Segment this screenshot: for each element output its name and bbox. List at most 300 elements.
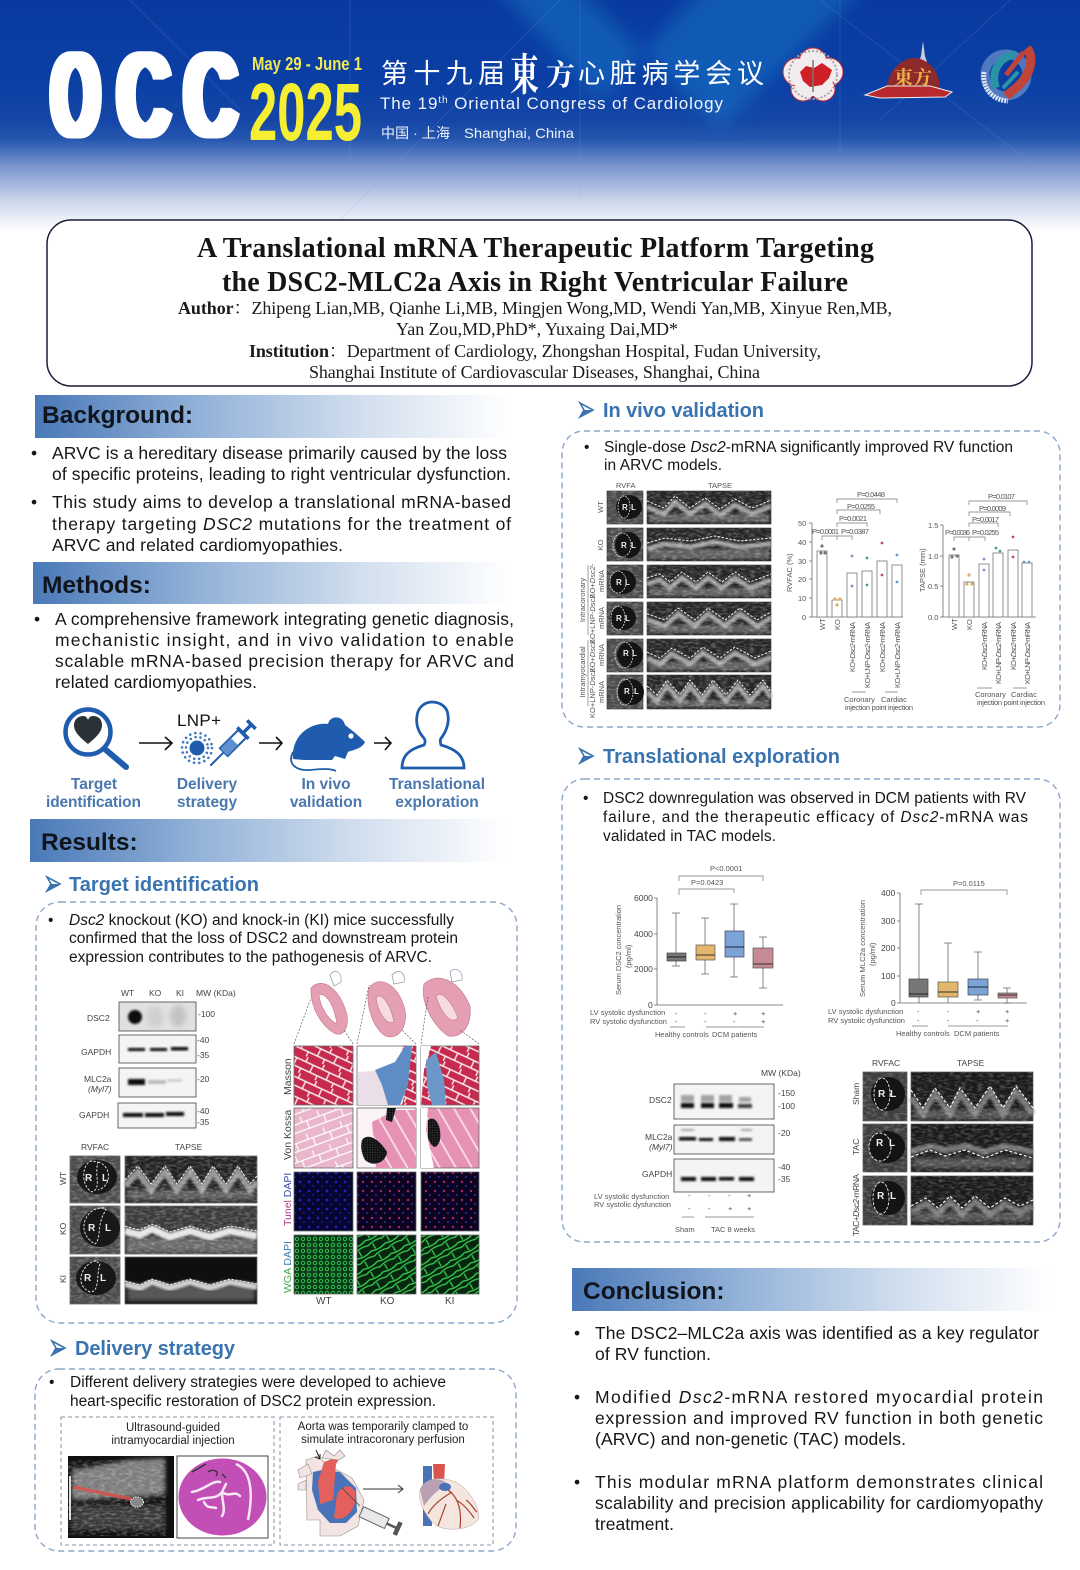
echocardiography: WT KO KI: R [84, 1273, 92, 1284]
sub-panel: intracoronary perfusion: simulate intracoronary perfusion [301, 1434, 465, 1446]
box plot: serum MLC2a: 100 [881, 971, 895, 981]
echocardiography: WT KO KI: R [88, 1223, 96, 1234]
box plot: serum DSC2: - [675, 1017, 678, 1026]
histology: Masson Von Kossa Tunel WGA image grid: WT [316, 1296, 332, 1307]
authors [178, 298, 892, 339]
bar chart: RVFAC: 40 [798, 538, 806, 547]
subheading: In vivo validation: In vivo validation [603, 400, 764, 422]
conclusion bullet text: of RV function. [595, 1344, 711, 1364]
bar chart: TAPSE: 0.5 [928, 582, 938, 591]
box plot: serum MLC2a: DCM patients [954, 1029, 1000, 1038]
background bullet text: ARVC is a hereditary disease primarily caused by the loss [52, 443, 507, 463]
box plot: serum MLC2a [828, 879, 1027, 1038]
bar chart: TAPSE: Coronary [975, 690, 1006, 699]
echocardiography grid: six groups: mRNA [597, 570, 606, 592]
western blot: TAC model: + [728, 1204, 733, 1213]
methods bullet text [34, 609, 514, 692]
echocardiography grid: six groups: R [616, 614, 622, 623]
congress location [381, 125, 574, 141]
step label: Target identification: identification [46, 794, 141, 811]
conclusion bullet text: This modular mRNA platform demonstrates clinical [595, 1472, 1043, 1492]
step label: Target identification: Target [71, 776, 117, 793]
heading: Background [35, 395, 510, 438]
panel text [583, 790, 1028, 845]
western blot: TAC model: + [747, 1191, 752, 1200]
bar chart: RVFAC: RVFAC (%) [785, 553, 794, 592]
congress name in English: The 19 [380, 94, 437, 113]
panel: in vivo validation [562, 431, 1060, 727]
institution [249, 341, 821, 382]
step label: Translational exploration: exploration [395, 794, 479, 811]
box plot: serum DSC2 [590, 864, 783, 1039]
bar chart: RVFAC [785, 490, 913, 712]
arrow [259, 737, 282, 750]
bar chart: TAPSE: KO+Dsc2-mRNA [1009, 622, 1018, 670]
conclusion bullet text: (ARVC) and non-genetic (TAC) models. [595, 1429, 906, 1449]
bar chart: RVFAC: P=0.0448 [857, 490, 885, 499]
echocardiography grid: six groups: WT [596, 501, 605, 513]
sub-panel: intracoronary perfusion: Aorta was temporarily clamped to [298, 1421, 468, 1433]
echocardiography grid: six groups [578, 481, 771, 718]
echocardiography: Sham TAC treated: TAC+Dsc2-mRNA [851, 1174, 861, 1236]
echocardiography grid: six groups: KO+LNP-Dsc2- [588, 666, 597, 718]
western blot: TAC model: (Myl7) [649, 1142, 673, 1152]
echocardiography grid: six groups: RVFA [616, 481, 635, 490]
histology: Masson Von Kossa Tunel WGA image grid: KI [445, 1296, 454, 1307]
heading: Methods: Methods: [42, 572, 151, 599]
western blot: DSC2 MLC2a GAPDH: MLC2a [84, 1074, 112, 1084]
box plot: serum MLC2a: LV systolic dysfunction [828, 1007, 903, 1016]
histology: whole heart sections [294, 969, 479, 1044]
illustration: coronary heart [420, 1464, 479, 1529]
box plot: serum MLC2a: Healthy controls [896, 1029, 950, 1038]
echocardiography: Sham TAC treated: TAC [851, 1139, 861, 1155]
conclusion bullet text: Modified Dsc2-mRNA restored myocardial protein [595, 1387, 1043, 1407]
congress name in Chinese: 方 [546, 59, 575, 92]
western blot: TAC model: TAC 8 weeks [711, 1225, 755, 1234]
congress date: May 29 - June 1 [252, 54, 362, 74]
ultrasound image [68, 1456, 174, 1538]
echocardiography: Sham TAC treated: TAPSE [957, 1058, 985, 1068]
echocardiography: WT KO KI: KO [58, 1222, 68, 1235]
western blot: DSC2 MLC2a GAPDH: -40 [197, 1106, 210, 1116]
icon: medical society seal [783, 48, 843, 101]
bar chart: TAPSE: P=0.0107 [988, 492, 1015, 501]
box plot: serum DSC2: Healthy controls [655, 1030, 709, 1039]
bar chart: TAPSE: TAPSE (mm) [918, 548, 927, 592]
echocardiography: Sham TAC treated: Sham [851, 1083, 861, 1105]
western blot: DSC2 MLC2a GAPDH: -40 [197, 1035, 210, 1045]
congress location: 中国 · 上海 [381, 125, 450, 141]
poster title: A Translational mRNA Therapeutic Platform Targeting [197, 233, 874, 264]
conclusion bullet text: scalability and precision applicability for cardiomyopathy [595, 1493, 1043, 1513]
heading: Background: Background: [42, 402, 193, 429]
box plot: serum MLC2a: + [1005, 1007, 1010, 1016]
icon: magnifier with heart [66, 710, 126, 767]
box plot: serum MLC2a: 300 [881, 916, 895, 926]
institution: Institution：Department of Cardiology, Zhongshan Hospital, Fudan University, [249, 341, 821, 361]
panel text: • [49, 1374, 54, 1391]
conclusion bullet text [574, 1323, 1043, 1534]
western blot: TAC model: LV systolic dysfunction [594, 1192, 669, 1201]
box plot: serum DSC2: 0 [648, 1000, 653, 1010]
echocardiography: Sham TAC treated: RVFAC [872, 1058, 900, 1068]
box plot: serum DSC2: + [761, 1009, 766, 1018]
OCC logo wordmark: O [52, 27, 100, 163]
box plot: serum DSC2: + [733, 1009, 738, 1018]
step label: Delivery strategy [177, 776, 238, 811]
bar chart: TAPSE: KO+LNP-Dsc2-mRNA [994, 622, 1003, 684]
bar chart: TAPSE: P=0.0017 [972, 515, 999, 524]
bar chart: RVFAC: KO+Dsc2-mRNA [878, 622, 887, 672]
step label: In vivo validation: validation [290, 794, 362, 811]
box plot: serum MLC2a: - [976, 1016, 979, 1025]
panel: delivery strategy [35, 1369, 516, 1551]
western blot: DSC2 MLC2a GAPDH: (Myl7) [88, 1084, 112, 1094]
sub-panel: intramyocardial injection [61, 1417, 274, 1545]
histology: Masson Von Kossa Tunel WGA image grid: KO [380, 1296, 395, 1307]
step label: Translational exploration: Translational [389, 776, 485, 793]
echocardiography grid: six groups: L [631, 503, 636, 512]
heading: Methods [33, 562, 510, 604]
echocardiography grid: six groups: KO+Dsc2- [588, 637, 597, 672]
bar chart: TAPSE: P=0.0036 [945, 528, 970, 537]
bar chart: TAPSE: KO [965, 619, 974, 630]
OCC logo wordmark: C [184, 27, 237, 163]
western blot: DSC2 MLC2a GAPDH: KI [176, 988, 184, 998]
western blot: TAC model: - [728, 1191, 731, 1200]
echocardiography grid: six groups: L [625, 578, 630, 587]
western blot: TAC model: GAPDH [642, 1169, 672, 1179]
panel text: • [48, 912, 53, 929]
sub-panel: intramyocardial injection: intramyocardial injection [111, 1435, 235, 1447]
bar chart: RVFAC: KO+LNP-Dsc2-mRNA [893, 622, 902, 688]
western blot: TAC model: RV systolic dysfunction [594, 1200, 671, 1209]
echocardiography: Sham TAC treated: R [876, 1138, 884, 1149]
OCC logo wordmark [52, 27, 237, 163]
arrow [374, 737, 391, 750]
western blot: DSC2 MLC2a GAPDH: DSC2 [87, 1013, 110, 1023]
background bullet text: of specific proteins, leading to right ventricular dysfunction. [52, 464, 511, 484]
western blot: TAC model: -40 [778, 1162, 791, 1172]
background bullet text [31, 443, 511, 555]
western blot: DSC2 MLC2a GAPDH [79, 988, 236, 1128]
box plot: serum DSC2: Serum DSC2 concentration [614, 905, 623, 995]
OCC logo wordmark: C [117, 27, 170, 163]
step label: Delivery strategy: strategy [177, 794, 238, 811]
conclusion bullet text: expression and improved RV function in both genetic [595, 1408, 1043, 1428]
bar chart: TAPSE: P=0.0255 [972, 528, 999, 537]
heading: Results [30, 819, 507, 862]
echocardiography grid: six groups: R [624, 687, 630, 696]
bar chart: RVFAC: 10 [798, 594, 806, 603]
echocardiography: WT KO KI [58, 1142, 257, 1304]
echocardiography: WT KO KI: WT [58, 1172, 68, 1185]
step label: Delivery strategy: Delivery [177, 776, 238, 793]
step label: Target identification [46, 776, 141, 811]
box plot: serum DSC2: 6000 [634, 893, 653, 903]
subheading: Delivery strategy: Delivery strategy [75, 1338, 236, 1360]
echocardiography: WT KO KI: L [102, 1173, 108, 1184]
bar chart: RVFAC: injection point injection [845, 703, 913, 712]
sub-panel: intracoronary perfusion [280, 1417, 493, 1545]
bar chart: TAPSE: 0.0 [928, 613, 938, 622]
box plot: serum MLC2a: + [976, 1007, 981, 1016]
panel text: Different delivery strategies were developed to achieve [70, 1374, 446, 1391]
panel text: validated in TAC models. [603, 828, 776, 845]
bar chart: TAPSE: 1.5 [928, 521, 938, 530]
box plot: serum DSC2: DCM patients [712, 1030, 758, 1039]
box plot: serum MLC2a: 200 [881, 943, 895, 953]
panel text: expression contributes to the pathogenesis of ARVC. [69, 949, 432, 966]
panel text: Single-dose Dsc2-mRNA significantly improved RV function [604, 439, 1013, 456]
box plot: serum DSC2: - [704, 1017, 707, 1026]
title and author box [47, 220, 1032, 386]
western blot: TAC model: -100 [778, 1101, 795, 1111]
box plot: serum MLC2a: RV systolic dysfunction [828, 1016, 905, 1025]
western blot: TAC model: - [688, 1204, 691, 1213]
echocardiography: Sham TAC treated [851, 1058, 1033, 1236]
icon: syringe [205, 719, 257, 771]
panel text: DSC2 downregulation was observed in DCM patients with RV [603, 790, 1027, 807]
bar chart: RVFAC: P=0.0387 [841, 527, 869, 536]
western blot: TAC model: MLC2a [645, 1132, 673, 1142]
western blot: TAC model: DSC2 [649, 1095, 672, 1105]
bar chart: TAPSE [918, 492, 1045, 707]
illustration: heart with syringe [298, 1450, 402, 1536]
panel text [48, 912, 458, 966]
histology: Masson Von Kossa Tunel WGA image grid: Tunel DAPI [282, 1173, 294, 1226]
echocardiography grid: six groups: TAPSE [708, 481, 732, 490]
bar chart: TAPSE: 1.0 [928, 552, 938, 561]
echocardiography: Sham TAC treated: L [890, 1191, 896, 1202]
echocardiography grid: six groups: L [634, 687, 639, 696]
panel text: heart-specific restoration of DSC2 protein expression. [70, 1393, 436, 1410]
box plot: serum DSC2: + [761, 1017, 766, 1026]
bar chart: RVFAC: P=0.0021 [839, 514, 867, 523]
echocardiography: WT KO KI: KI [58, 1275, 68, 1283]
echocardiography grid: six groups: mRNA [597, 644, 606, 666]
box plot: serum DSC2: P<0.0001 [710, 864, 742, 873]
congress name in Chinese: 第十九届 [381, 59, 505, 89]
echocardiography grid: six groups: L [625, 614, 630, 623]
icon: person outline [402, 702, 464, 768]
western blot: DSC2 MLC2a GAPDH: -100 [198, 1009, 215, 1019]
bar chart: TAPSE: Cardiac [1011, 690, 1037, 699]
bar chart: TAPSE: KO+Dsc2-mRNA [980, 622, 989, 670]
western blot: TAC model: -150 [778, 1088, 795, 1098]
echocardiography: WT KO KI: RVFAC [81, 1142, 109, 1152]
heading: Conclusion [572, 1268, 1050, 1311]
heading: Results: Results: [41, 829, 138, 856]
western blot: TAC model: - [708, 1191, 711, 1200]
western blot: TAC model: Sham [675, 1225, 695, 1234]
echocardiography grid: six groups: mRNA [597, 607, 606, 629]
bar chart: RVFAC: WT [818, 618, 827, 630]
step label: In vivo validation [290, 776, 362, 811]
label: LNP plus: LNP+ [177, 711, 221, 730]
bar chart: TAPSE: KO+LNP-Dsc2-mRNA [1023, 622, 1032, 684]
western blot: TAC model: -35 [778, 1174, 791, 1184]
western blot: DSC2 MLC2a GAPDH: GAPDH [81, 1047, 111, 1057]
poster title: the DSC2-MLC2a Axis in Right Ventricular Failure [222, 267, 848, 298]
heading: Conclusion: Conclusion: [583, 1278, 725, 1305]
western blot: DSC2 MLC2a GAPDH: WT [121, 988, 134, 998]
bar chart: RVFAC: Coronary [844, 695, 875, 704]
sub-panel: intramyocardial injection: Ultrasound-guided [126, 1422, 220, 1434]
panel text: • [583, 790, 588, 807]
box plot: serum MLC2a: Serum MLC2a concentration [858, 900, 867, 997]
panel text: Dsc2 knockout (KO) and knock-in (KI) mice successfully [69, 912, 454, 929]
methods bullet text: A comprehensive framework integrating genetic diagnosis, [55, 609, 514, 629]
panel text: • [584, 439, 589, 456]
conclusion bullet text: • [574, 1323, 580, 1343]
western blot: TAC model: -20 [778, 1128, 791, 1138]
bar chart: RVFAC: KO [833, 619, 842, 630]
panel text [49, 1374, 446, 1410]
arrow [139, 737, 172, 750]
box plot: serum MLC2a: 0 [891, 998, 896, 1008]
echocardiography: Sham TAC treated: L [890, 1089, 896, 1100]
box plot: serum DSC2: 4000 [634, 929, 653, 939]
conclusion bullet text: The DSC2–MLC2a axis was identified as a key regulator [595, 1323, 1039, 1343]
icon: ring society logo [984, 48, 1031, 101]
bar chart: RVFAC: Cardiac [881, 695, 907, 704]
subheading: Target identification: Target identification [69, 874, 259, 896]
bar chart: RVFAC: 30 [798, 557, 806, 566]
western blot: DSC2 MLC2a GAPDH: MW (KDa) [196, 988, 236, 998]
histology: Masson Von Kossa Tunel WGA image grid [282, 1046, 479, 1307]
echocardiography grid: six groups: Intracoronary [578, 578, 587, 622]
western blot: DSC2 MLC2a GAPDH: -20 [197, 1074, 210, 1084]
conclusion bullet text: treatment. [595, 1514, 674, 1534]
box plot: serum MLC2a: - [947, 1007, 950, 1016]
echocardiography grid: six groups: L [632, 649, 637, 658]
box plot: serum MLC2a: + [1005, 1016, 1010, 1025]
western blot: TAC model: MW (KDa) [761, 1068, 801, 1078]
box plot: serum MLC2a: P=0.0115 [953, 879, 985, 888]
congress name in Chinese: 心脏病学会议 [578, 59, 764, 89]
echocardiography grid: six groups: R [622, 503, 628, 512]
bar chart: RVFAC: 50 [798, 519, 806, 528]
congress name in Chinese: 東 [510, 51, 539, 100]
workflow diagram [46, 702, 485, 811]
echocardiography grid: six groups: KO+LNP-Dsc2- [588, 592, 597, 644]
echocardiography grid: six groups: R [616, 578, 622, 587]
panel text: confirmed that the loss of DSC2 and downstream protein [69, 930, 458, 947]
congress location: Shanghai, China [464, 125, 574, 141]
box plot: serum MLC2a: (pg/ml) [868, 942, 877, 966]
echocardiography grid: six groups: KO+Dsc2- [588, 563, 597, 598]
poster title [197, 233, 874, 298]
institution: Shanghai Institute of Cardiovascular Diseases, Shanghai, China [309, 362, 760, 382]
icon: mouse [291, 717, 365, 771]
step label: In vivo validation: In vivo [301, 776, 351, 793]
western blot: TAC model: - [708, 1204, 711, 1213]
bar chart: TAPSE: injection point injection [977, 698, 1045, 707]
box plot: serum MLC2a: - [917, 1016, 920, 1025]
box plot: serum DSC2: - [733, 1017, 736, 1026]
bar chart: RVFAC: P=0.0255 [847, 502, 875, 511]
western blot: DSC2 MLC2a GAPDH: -35 [197, 1117, 210, 1127]
icon: lipid nanoparticle [182, 733, 212, 763]
echocardiography grid: six groups: mRNA [597, 681, 606, 703]
box plot: serum DSC2: P=0.0423 [691, 878, 723, 887]
background bullet text: This study aims to develop a translational mRNA-based [52, 492, 511, 512]
background bullet text: therapy targeting DSC2 mutations for the treatment of [52, 514, 511, 534]
authors: Author：Zhipeng Lian,MB, Qianhe Li,MB, Mingjen Wong,MD, Wendi Yan,MB, Xinyue Ren,MB, [178, 298, 892, 318]
echocardiography: Sham TAC treated: R [878, 1089, 886, 1100]
echocardiography grid: six groups: R [621, 541, 627, 550]
methods bullet text: related cardiomyopathies. [55, 672, 257, 692]
background bullet text: ARVC and related cardiomyopathies. [52, 535, 343, 555]
methods bullet text: mechanistic insight, and in vivo validation to enable [55, 630, 514, 650]
echocardiography grid: six groups: L [631, 541, 636, 550]
icon: Oriental Congress emblem: 東方 [894, 66, 932, 89]
histology: Masson Von Kossa Tunel WGA image grid: Masson [282, 1058, 294, 1095]
background bullet text: • [31, 443, 37, 463]
western blot: DSC2 MLC2a GAPDH: GAPDH [79, 1110, 109, 1120]
histology: Masson Von Kossa Tunel WGA image grid: WGA DAPI [282, 1241, 294, 1293]
bar chart: RVFAC: 20 [798, 575, 806, 584]
box plot: serum MLC2a: - [917, 1007, 920, 1016]
panel text: failure, and the therapeutic efficacy of Dsc2-mRNA was [603, 809, 1028, 826]
congress name in English: Oriental Congress of Cardiology [448, 94, 724, 113]
panel: translational exploration [562, 779, 1060, 1242]
echocardiography grid: six groups: Intramyocardial [578, 646, 587, 698]
icon: Oriental Congress emblem [865, 41, 952, 98]
echocardiography grid: six groups: R [623, 649, 629, 658]
western blot: TAC model [594, 1068, 801, 1234]
arrow [363, 1485, 403, 1493]
echocardiography: Sham TAC treated: R [877, 1191, 885, 1202]
panel text: in ARVC models. [604, 457, 722, 474]
authors: Yan Zou,MD,PhD*, Yuxaing Dai,MD* [396, 319, 678, 339]
echocardiography: WT KO KI: L [100, 1273, 106, 1284]
bar chart: RVFAC: P=0.0001 [812, 527, 839, 536]
echocardiography grid: six groups: KO [596, 539, 605, 550]
bar chart: TAPSE: WT [950, 618, 959, 630]
conclusion bullet text: • [574, 1387, 580, 1407]
echocardiography: WT KO KI: L [105, 1223, 111, 1234]
methods bullet text: • [34, 609, 40, 629]
congress name in Chinese [381, 51, 764, 100]
bar chart: RVFAC: 0 [802, 613, 806, 622]
box plot: serum DSC2: - [675, 1009, 678, 1018]
congress name in English: th [438, 95, 448, 106]
bar chart: RVFAC: KO+Dsc2-mRNA [848, 622, 857, 672]
bar chart: RVFAC: KO+LNP-Dsc2-mRNA [863, 622, 872, 688]
background bullet text: • [31, 492, 37, 512]
western blot: DSC2 MLC2a GAPDH: -35 [197, 1050, 210, 1060]
echocardiography: Sham TAC treated: L [889, 1138, 895, 1149]
box plot: serum MLC2a: - [947, 1016, 950, 1025]
histology: Masson Von Kossa Tunel WGA image grid: Von Kossa [282, 1110, 294, 1160]
western blot: TAC model: - [688, 1191, 691, 1200]
echocardiography: WT KO KI: R [85, 1173, 93, 1184]
box plot: serum DSC2: - [704, 1009, 707, 1018]
conference header banner [0, 0, 1080, 232]
methods bullet text: scalable mRNA-based precision therapy for ARVC and [55, 651, 514, 671]
box plot: serum MLC2a: 400 [881, 888, 895, 898]
box plot: serum DSC2: 2000 [634, 964, 653, 974]
conclusion bullet text: • [574, 1472, 580, 1492]
histology cross section [177, 1456, 268, 1538]
step label: Translational exploration [389, 776, 485, 811]
bar chart: TAPSE: P=0.0009 [979, 504, 1006, 513]
echocardiography: WT KO KI: TAPSE [175, 1142, 203, 1152]
congress year: 2025 [249, 67, 362, 158]
